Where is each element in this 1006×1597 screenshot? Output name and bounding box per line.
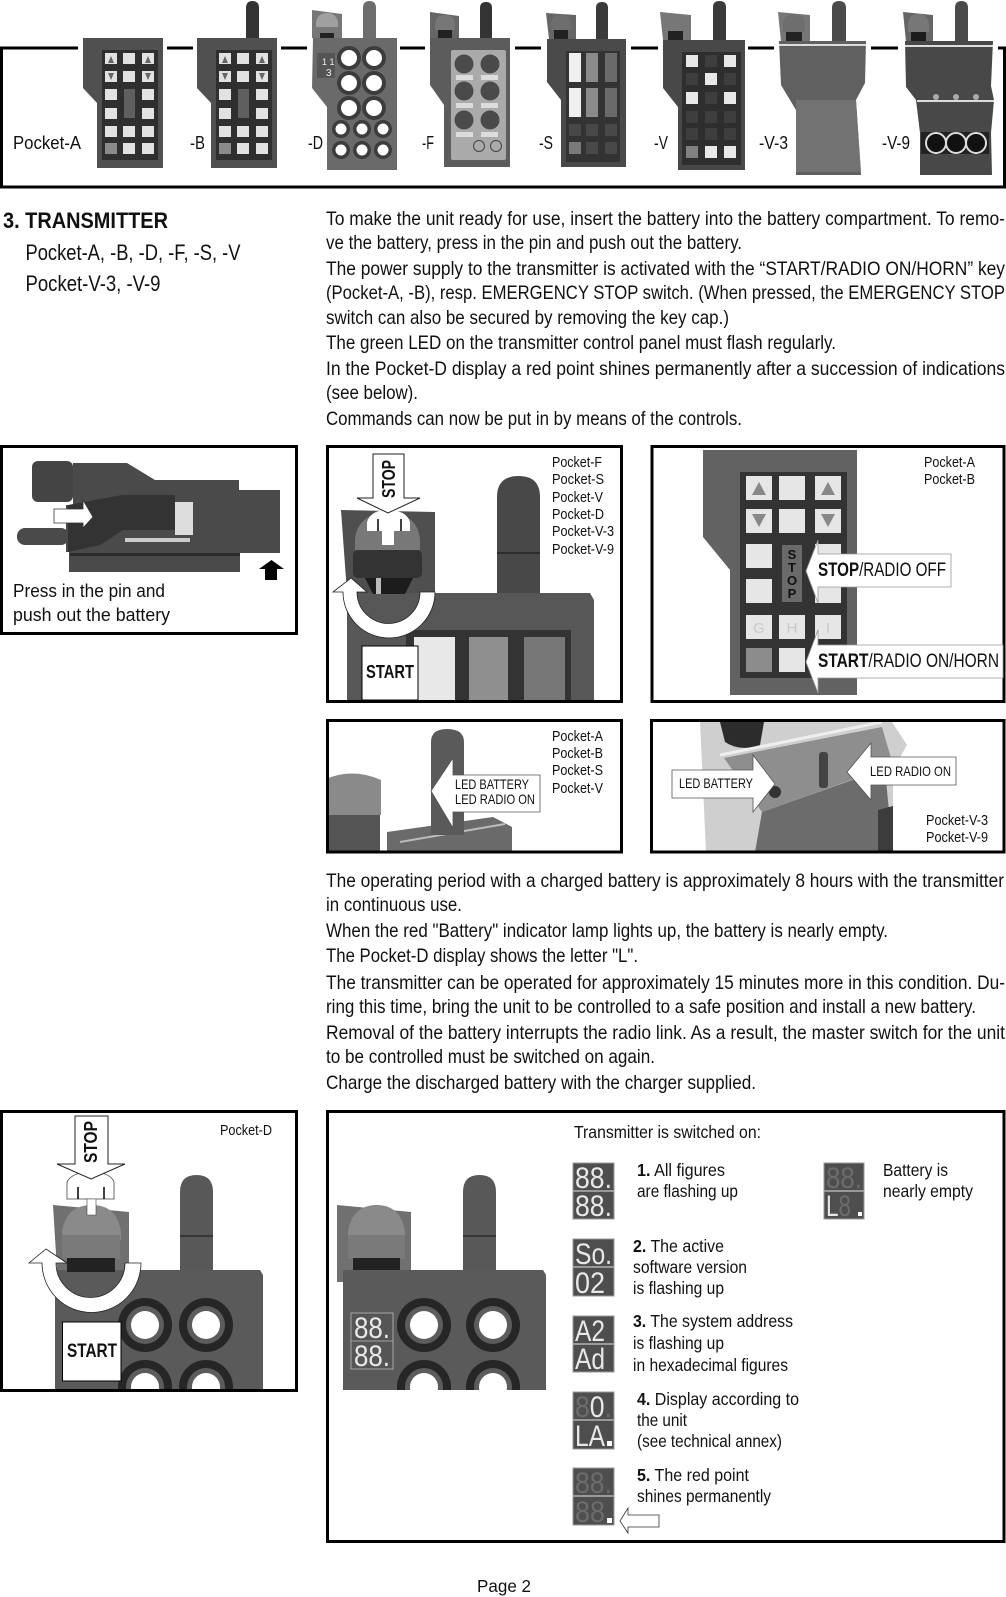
step 4 display: 80. [575,1391,612,1424]
arrow: push pin [54,500,93,528]
model list [926,813,988,846]
text block: operating period: Charge the discharged battery with the charger supplied. [326,1072,756,1094]
model list [924,455,975,488]
panel: start and stop, Pocket-D [2,1112,296,1414]
model list: Pocket-V [552,781,603,797]
STOP vertical label: O [787,573,797,588]
step 3 display: A2 [575,1315,605,1348]
text block: operating period: in continuous use. [326,894,462,916]
battery empty display [824,1162,864,1223]
arrow: rotate to start [333,578,435,638]
step 3 text [633,1311,793,1375]
step 4 display [573,1391,614,1453]
key and STOP arrow: STOP [379,460,399,498]
step 5 text: shines permanently [637,1486,771,1506]
START label [362,646,418,700]
step 5 display: 88 [575,1496,605,1529]
START label [62,1322,121,1381]
device: Pocket-V-3 [778,1,866,175]
callout: LED radio on: LED RADIO ON [870,763,951,779]
model list: Pocket-V [552,490,603,506]
model labels: -F [422,133,434,153]
STOP vertical label: S [788,547,797,562]
transmitter photo [180,1175,213,1270]
STOP vertical label: P [788,586,797,601]
housing photo [700,722,907,852]
text block: operating period: When the red "Battery" indicator lamp lights up, the battery is nearly empty. [326,920,888,942]
STOP vertical label: T [788,560,796,575]
step 2 text: is flashing up [633,1278,724,1298]
caption [13,581,170,625]
antenna [497,476,540,593]
panel: start and stop, Pocket-A B: H [787,620,797,637]
heading: transmitter: 3. TRANSMITTER [3,208,168,233]
photo: transmitter back with battery [17,461,284,580]
heading: transmitter: Pocket-V-3, -V-9 [26,271,160,296]
transmitter body [347,593,594,702]
callout: LED battery and radio on [431,758,540,828]
model list: Pocket-A [924,455,975,471]
text block: getting ready: switch can also be secured by removing the key cap.) [326,307,729,329]
model labels: -D [308,133,323,153]
panel: start and stop, Pocket-A B: I [826,620,830,637]
model list: Pocket-D [552,507,604,523]
battery empty text [883,1160,973,1201]
step 4 display: LA [575,1420,605,1453]
page number: Page 2 [477,1576,531,1596]
panel: display indications [328,1112,1004,1542]
model list: Pocket-B [924,472,975,488]
model list [552,729,603,797]
callout: LED battery [672,755,775,812]
device: Pocket-D [312,1,397,170]
step 1 text: are flashing up [637,1181,738,1201]
step 3 display: Ad [575,1343,605,1376]
device: Pocket-D: 3 [326,68,332,79]
battery empty text: Battery is [883,1160,948,1180]
step 3 text: is flashing up [633,1333,724,1353]
device: Pocket-S [546,2,626,167]
START label: START [67,1341,117,1362]
arrow: red point [620,1508,659,1533]
photo display: 88. [354,1312,390,1345]
photo display: 88. [354,1340,390,1373]
heading: transmitter: Pocket-A, -B, -D, -F, -S, -V [26,240,241,265]
text block: getting ready: The green LED on the transmitter control panel must flash regularly. [326,332,836,354]
model labels: -V-3 [759,133,788,153]
model list: Pocket-A [552,729,603,745]
key and STOP arrow [57,1116,125,1215]
step 4 text: the unit [637,1410,687,1430]
callout: LED battery: LED BATTERY [679,775,754,791]
step 1 display: 88. [575,1190,612,1223]
device: Pocket-V [660,1,745,170]
panel: start and stop, Pocket-F S V D V-3 V-9 [328,446,622,702]
transmitter photo [463,1175,496,1270]
text block: getting ready: ve the battery, press in the pin and push out the battery. [326,232,742,254]
caption: push out the battery [13,605,170,625]
step 2 text: 2. The active [633,1236,724,1256]
step 4 text [637,1389,799,1451]
device: Pocket-D: 1 1 [322,57,335,67]
device: Pocket-F [430,2,510,167]
model list: Pocket-V-9 [552,542,614,558]
step 1 display [573,1162,614,1223]
model labels [13,133,910,153]
device: Pocket-V-9 [903,1,994,175]
photo display [351,1312,393,1373]
model list: Pocket-F [552,455,602,471]
heading: transmitter [3,208,241,296]
step 1 text [637,1160,738,1201]
step 5 display: 88. [575,1467,612,1500]
panel: LEDs, Pocket-V-3 V-9 [652,720,1004,852]
step 3 text: in hexadecimal figures [633,1355,788,1375]
step 4 text: 4. Display according to [637,1389,799,1409]
text block: operating period: The Pocket-D display shows the letter "L". [326,945,638,967]
callout: START / RADIO ON / HORN [806,630,1003,693]
model list: Pocket-V-9 [926,830,988,846]
panel: LEDs, Pocket-A B S V [328,720,622,852]
step 2 text [633,1236,747,1298]
model list: Pocket-S [552,763,603,779]
model labels: -V-9 [882,133,910,153]
arrow: rotate to start [29,1249,141,1312]
transmitter photo [387,817,512,852]
model labels: -S [539,133,553,153]
panel: start and stop, Pocket-A B: G [753,620,765,637]
text block: operating period [326,870,1006,1094]
text block: getting ready: (see below). [326,382,418,404]
callout: LED battery and radio on: LED BATTERY [455,776,530,792]
step 1 text: 1. All figures [637,1160,725,1180]
step 2 display [573,1238,614,1300]
model label: Pocket-D [220,1123,272,1139]
step 3 display [573,1315,614,1376]
panel: battery removal [2,446,296,634]
model list [552,455,614,558]
callout: STOP / RADIO OFF [806,540,951,603]
callout: STOP / RADIO OFF: STOP/RADIO OFF [818,560,946,581]
heading: Transmitter is switched on: [574,1122,761,1142]
model labels: -B [190,133,205,153]
START label: START [366,662,414,682]
step 1 display: 88. [575,1162,612,1195]
panel: product line-up [0,1,1006,187]
device: Pocket-B [197,1,277,168]
battery empty display: 88. [826,1162,862,1195]
step 2 text: software version [633,1257,747,1277]
step 5 text: 5. The red point [637,1465,749,1485]
step 2 display: So. [575,1238,612,1271]
text block: getting ready: Commands can now be put in by means of the controls. [326,408,742,430]
model list: Pocket-V-3 [926,813,988,829]
step 4 text: (see technical annex) [637,1431,782,1451]
key and STOP arrow: STOP [81,1121,101,1163]
arrow: black up [259,560,284,580]
callout: LED radio on [847,743,956,800]
key and STOP arrow [357,454,420,545]
STOP vertical label [787,547,797,601]
step 2 display: 02 [575,1267,605,1300]
battery empty display: L8 [826,1190,851,1223]
keys [406,630,571,702]
device: Pocket-A [83,38,163,168]
panel: start and stop, Pocket-A B [652,446,1004,702]
text block: getting ready [326,208,1005,430]
model list: Pocket-S [552,472,604,488]
text block: operating period: to be controlled must be switched on again. [326,1046,655,1068]
step 5 display [573,1467,614,1529]
callout: LED battery and radio on: LED RADIO ON [455,791,535,807]
model list: Pocket-V-3 [552,524,614,540]
model labels: Pocket-A [13,133,81,153]
caption: Press in the pin and [13,581,165,601]
model labels: -V [654,133,668,153]
model list: Pocket-B [552,746,603,762]
battery empty text: nearly empty [883,1181,973,1201]
step 3 text: 3. The system address [633,1311,793,1331]
step 5 text [637,1465,771,1506]
keypad photo [703,450,857,695]
